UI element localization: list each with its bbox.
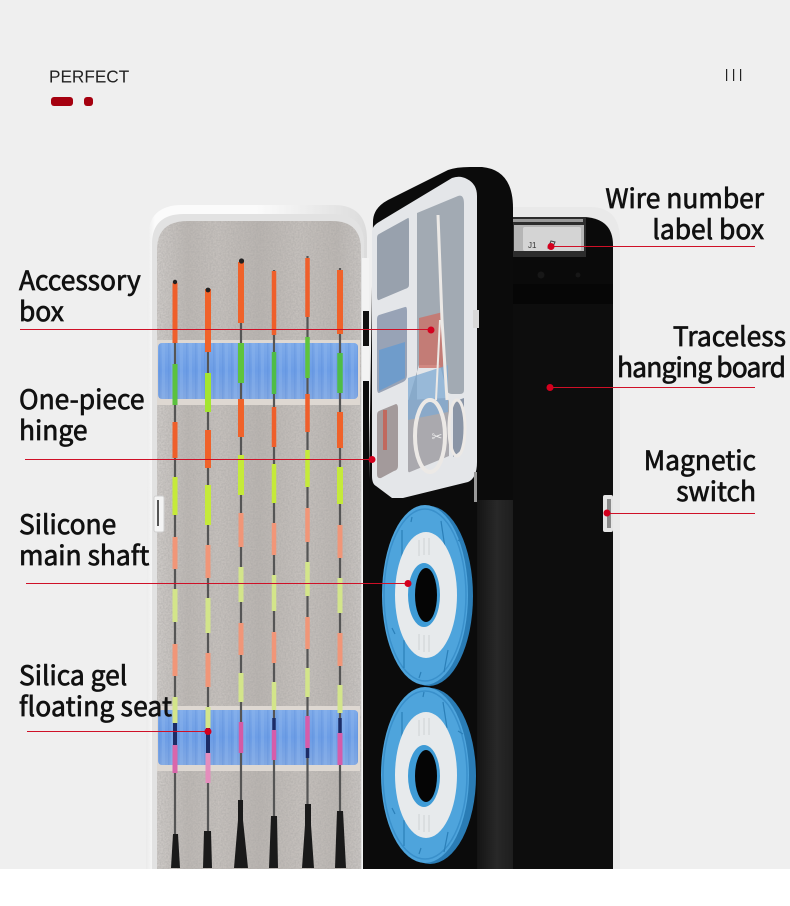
traceless hanging board bbox=[505, 217, 613, 869]
spool bottom bbox=[381, 687, 476, 864]
tray latch bbox=[154, 496, 164, 532]
compartment: bottom left bbox=[377, 404, 398, 478]
panel: one-piece hinge strip bbox=[362, 258, 369, 869]
scissors mark: ✂ bbox=[432, 430, 443, 445]
float 5 bbox=[302, 256, 314, 868]
callout: Wire number label box: label box bbox=[652, 208, 764, 247]
callout: Silicone main shaft: main shaft bbox=[19, 534, 149, 573]
float 3 bbox=[234, 258, 248, 868]
callout: Wire number label box: Wire number bbox=[605, 177, 765, 216]
callout: Traceless hanging board: Traceless bbox=[673, 315, 786, 354]
scissors bbox=[415, 215, 465, 472]
compartment: top left bbox=[377, 218, 409, 300]
compartment: middle left bbox=[377, 307, 407, 393]
float 1 bbox=[171, 280, 180, 868]
silicone band: upper bbox=[157, 340, 360, 405]
icon: three vertical bars bbox=[726, 69, 741, 81]
callout: Magnetic switch bbox=[604, 439, 756, 516]
callout: Accessory box bbox=[19, 259, 434, 334]
panel: right storage tray bbox=[500, 207, 620, 869]
wire number label box: J1 bbox=[528, 241, 537, 250]
callout: Silica gel floating seat: floating seat bbox=[19, 685, 172, 724]
spool top bbox=[382, 505, 473, 686]
magnetic switch bbox=[603, 495, 613, 532]
compartment: bottom right bbox=[453, 398, 464, 457]
panel: black centre lid bbox=[369, 167, 513, 869]
callout: Traceless hanging board bbox=[546, 315, 786, 391]
brand heading: PERFECT bbox=[49, 66, 130, 106]
callout: Silicone main shaft bbox=[19, 503, 412, 587]
float 2 bbox=[203, 288, 212, 868]
brand heading: PERFECT: PERFECT bbox=[49, 66, 130, 86]
accessory box bbox=[372, 177, 477, 498]
callout: Silicone main shaft: Silicone bbox=[19, 503, 116, 542]
callout: Wire number label box bbox=[548, 177, 765, 250]
float 6 bbox=[335, 268, 346, 868]
callout: Magnetic switch: switch bbox=[676, 470, 756, 509]
callout: Silica gel floating seat bbox=[19, 654, 212, 735]
callout: One-piece hinge bbox=[19, 378, 376, 463]
silicone band: lower bbox=[157, 706, 360, 771]
callout: Accessory box: box bbox=[19, 290, 64, 329]
callout: One-piece hinge: hinge bbox=[19, 409, 87, 448]
box latch bbox=[473, 310, 479, 328]
compartment: top right large bbox=[408, 196, 464, 402]
callout: One-piece hinge: One-piece bbox=[19, 378, 144, 417]
callout: Silica gel floating seat: Silica gel bbox=[19, 654, 127, 693]
wire number label box bbox=[513, 217, 586, 257]
callout: Magnetic switch: Magnetic bbox=[644, 439, 756, 478]
float 4 bbox=[269, 270, 278, 868]
panel: left float tray bbox=[146, 205, 367, 869]
floats bbox=[171, 256, 346, 868]
callout: Traceless hanging board: hanging board bbox=[617, 346, 786, 385]
callout: Accessory box: Accessory bbox=[19, 259, 141, 298]
compartment: bottom centre bbox=[408, 398, 449, 472]
